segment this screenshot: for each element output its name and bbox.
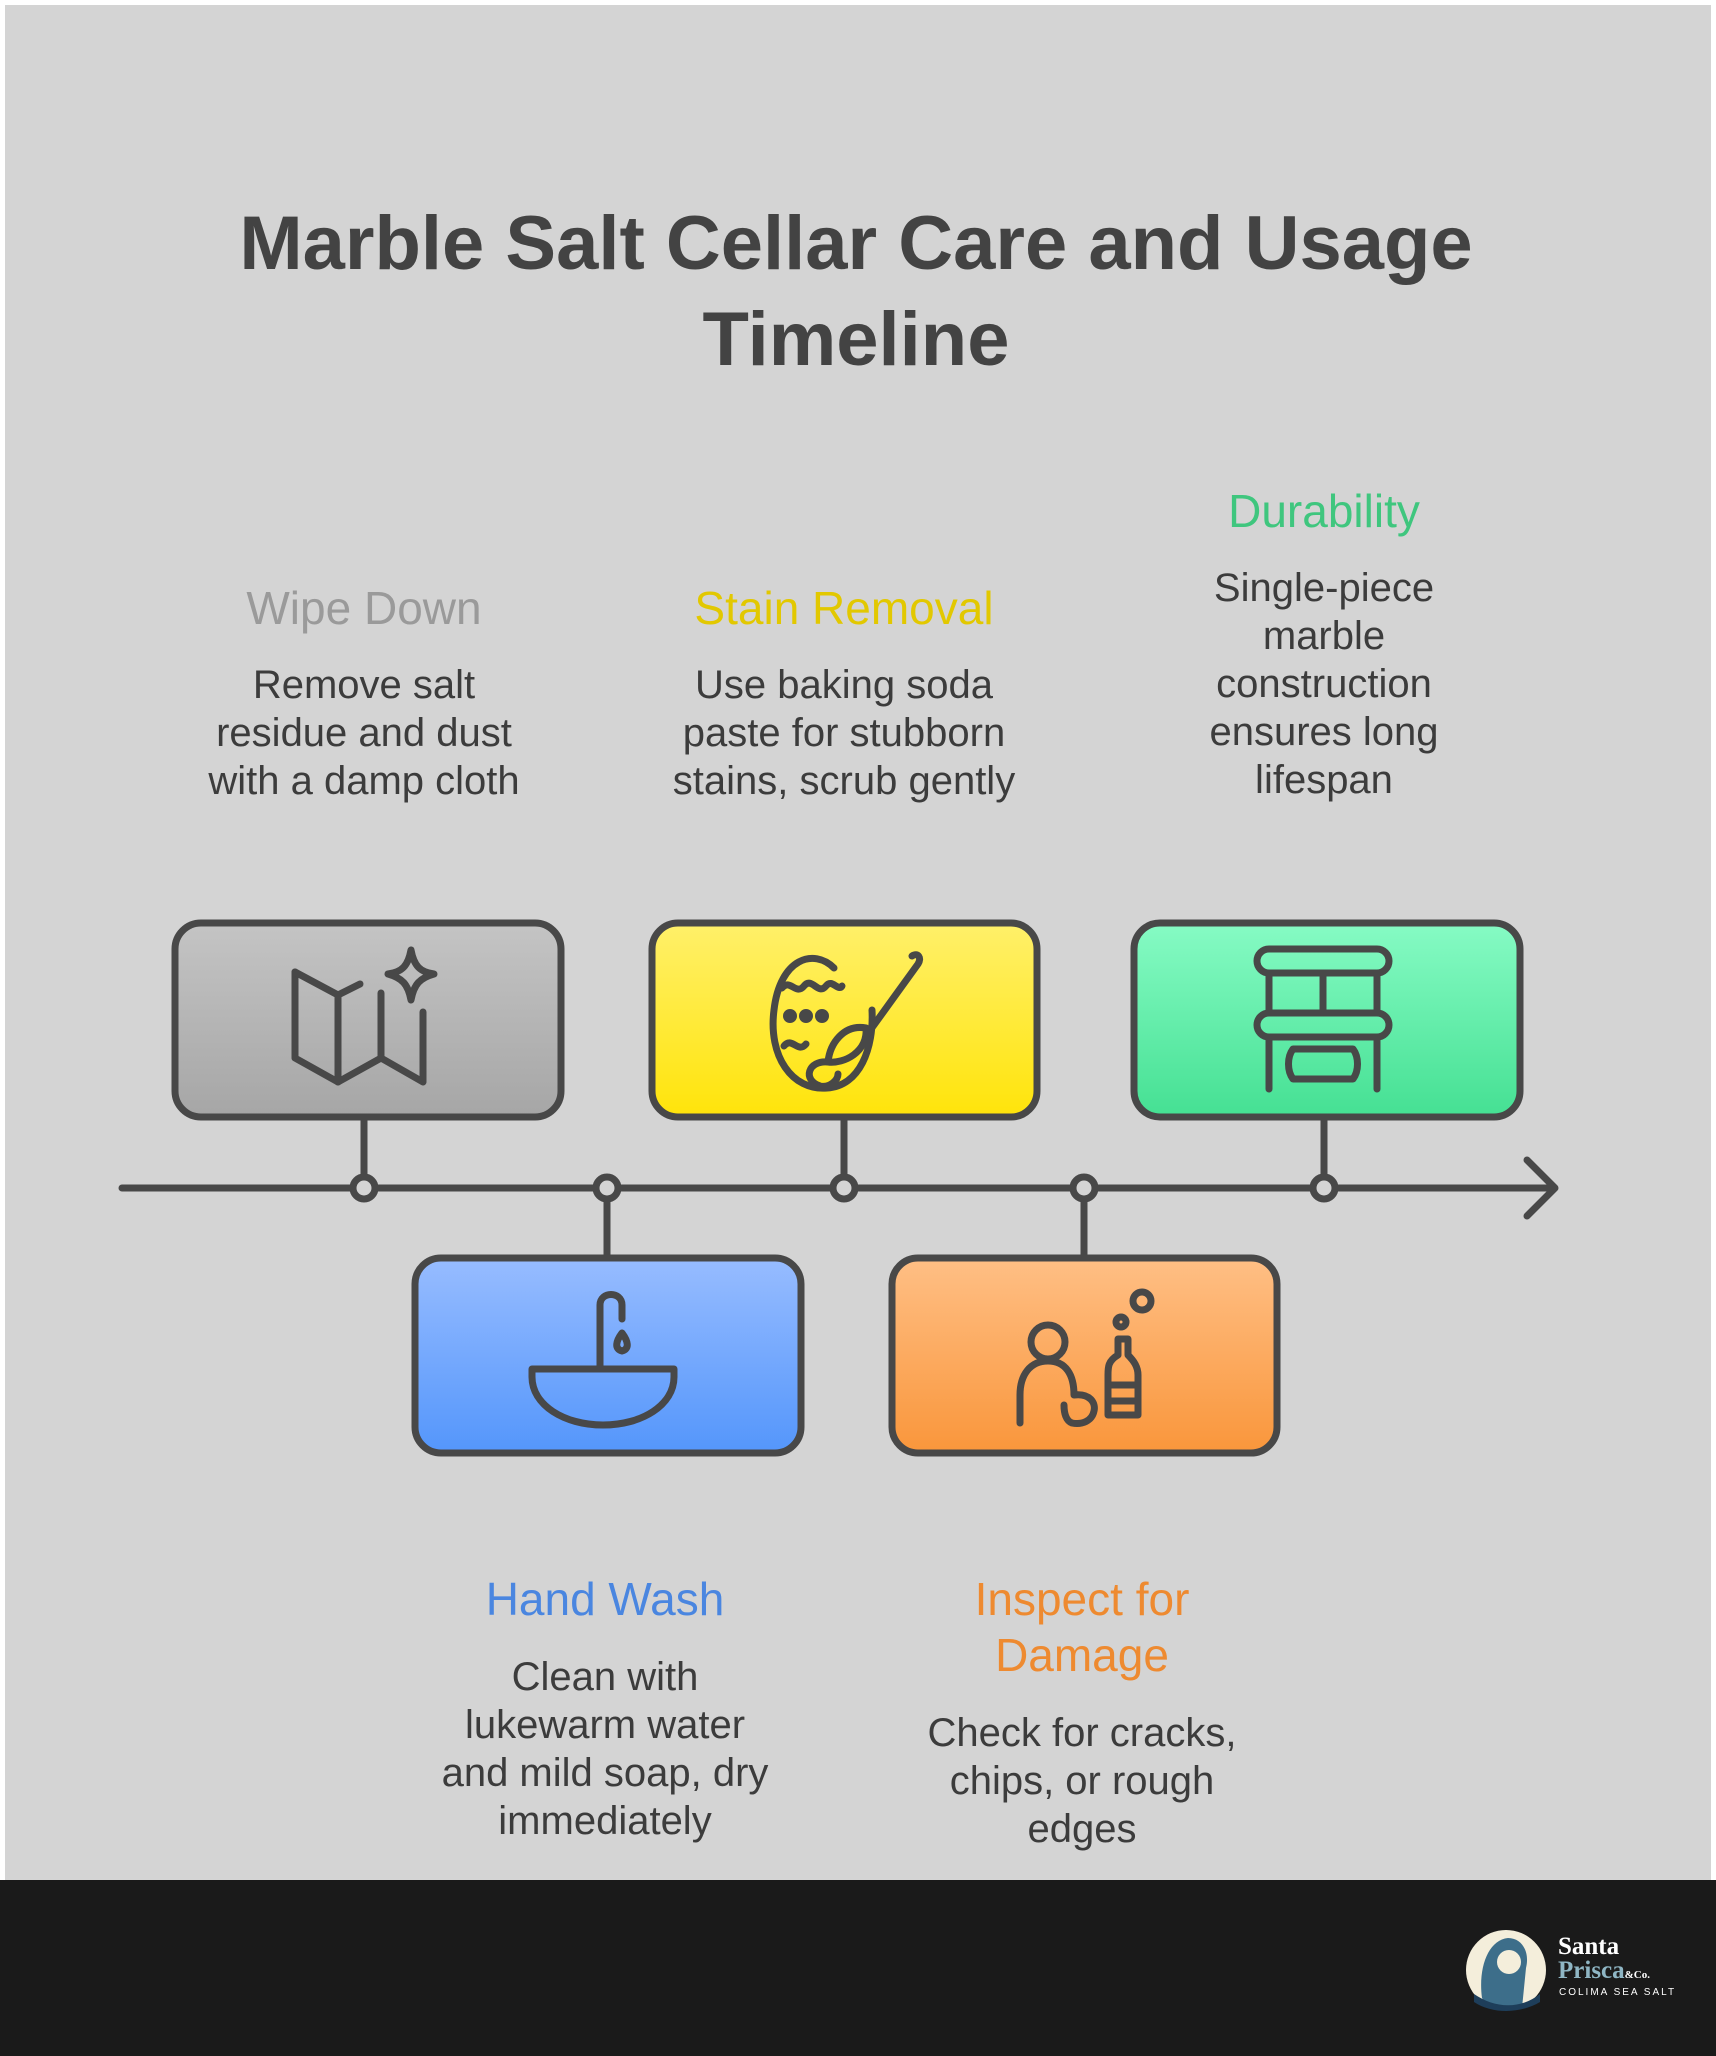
text: durability: Durability <box>1228 485 1420 537</box>
box: stain removal <box>652 923 1037 1117</box>
logo emblem <box>1466 1930 1546 2011</box>
text: durability: Single-piece <box>1214 566 1434 610</box>
text: hand wash: and mild soap, dry <box>442 1751 768 1795</box>
icon: map sparkle <box>295 950 434 1082</box>
text: durability: marble <box>1263 614 1385 658</box>
text: durability: lifespan <box>1255 758 1393 802</box>
nodes <box>353 1177 1335 1199</box>
icon: person bottle <box>1020 1292 1151 1424</box>
text: stain removal: stains, scrub gently <box>673 759 1015 803</box>
icon: sink <box>532 1294 674 1425</box>
text: durability: ensures long <box>1209 710 1439 754</box>
text: inspect: edges <box>1028 1807 1136 1851</box>
logo: COLIMA SEA SALT <box>1559 1987 1676 1998</box>
text: stain removal: Use baking soda <box>695 663 993 707</box>
text: inspect: chips, or rough <box>950 1759 1214 1803</box>
text: hand wash: Hand Wash <box>486 1573 724 1625</box>
text: hand wash: immediately <box>498 1799 712 1843</box>
box: hand wash <box>415 1258 801 1453</box>
text: stain removal: paste for stubborn <box>683 711 1005 755</box>
icon: palette brush <box>773 955 920 1088</box>
text: hand wash: lukewarm water <box>465 1703 745 1747</box>
title: Timeline <box>703 297 1009 382</box>
icon: chair <box>1257 949 1389 1089</box>
text: stain removal: Stain Removal <box>694 582 994 634</box>
logo <box>1466 1930 1676 2011</box>
text: inspect: Damage <box>995 1629 1169 1681</box>
logo text <box>1558 1933 1650 1984</box>
text: inspect: Inspect for <box>975 1573 1189 1625</box>
text: wipe down <box>208 582 520 803</box>
text: inspect <box>928 1573 1236 1851</box>
box: durability <box>1134 923 1520 1117</box>
title: Marble Salt Cellar Care and Usage <box>239 201 1473 286</box>
title <box>239 201 1473 382</box>
text: durability <box>1209 485 1439 802</box>
text: wipe down: with a damp cloth <box>208 759 520 803</box>
text: stain removal <box>673 582 1016 803</box>
text: hand wash <box>442 1573 768 1843</box>
box: inspect <box>892 1258 1277 1453</box>
text: wipe down: Remove salt <box>253 663 475 707</box>
text: inspect: Check for cracks, <box>928 1711 1236 1755</box>
connectors <box>364 1117 1324 1258</box>
text: hand wash: Clean with <box>512 1655 698 1699</box>
logo text: Santa <box>1558 1933 1619 1960</box>
box: wipe down <box>175 923 561 1117</box>
logo text: Prisca&Co. <box>1558 1957 1650 1984</box>
text: durability: construction <box>1216 662 1432 706</box>
text: wipe down: residue and dust <box>216 711 512 755</box>
timeline arrow <box>122 1160 1555 1216</box>
text: wipe down: Wipe Down <box>246 582 482 634</box>
